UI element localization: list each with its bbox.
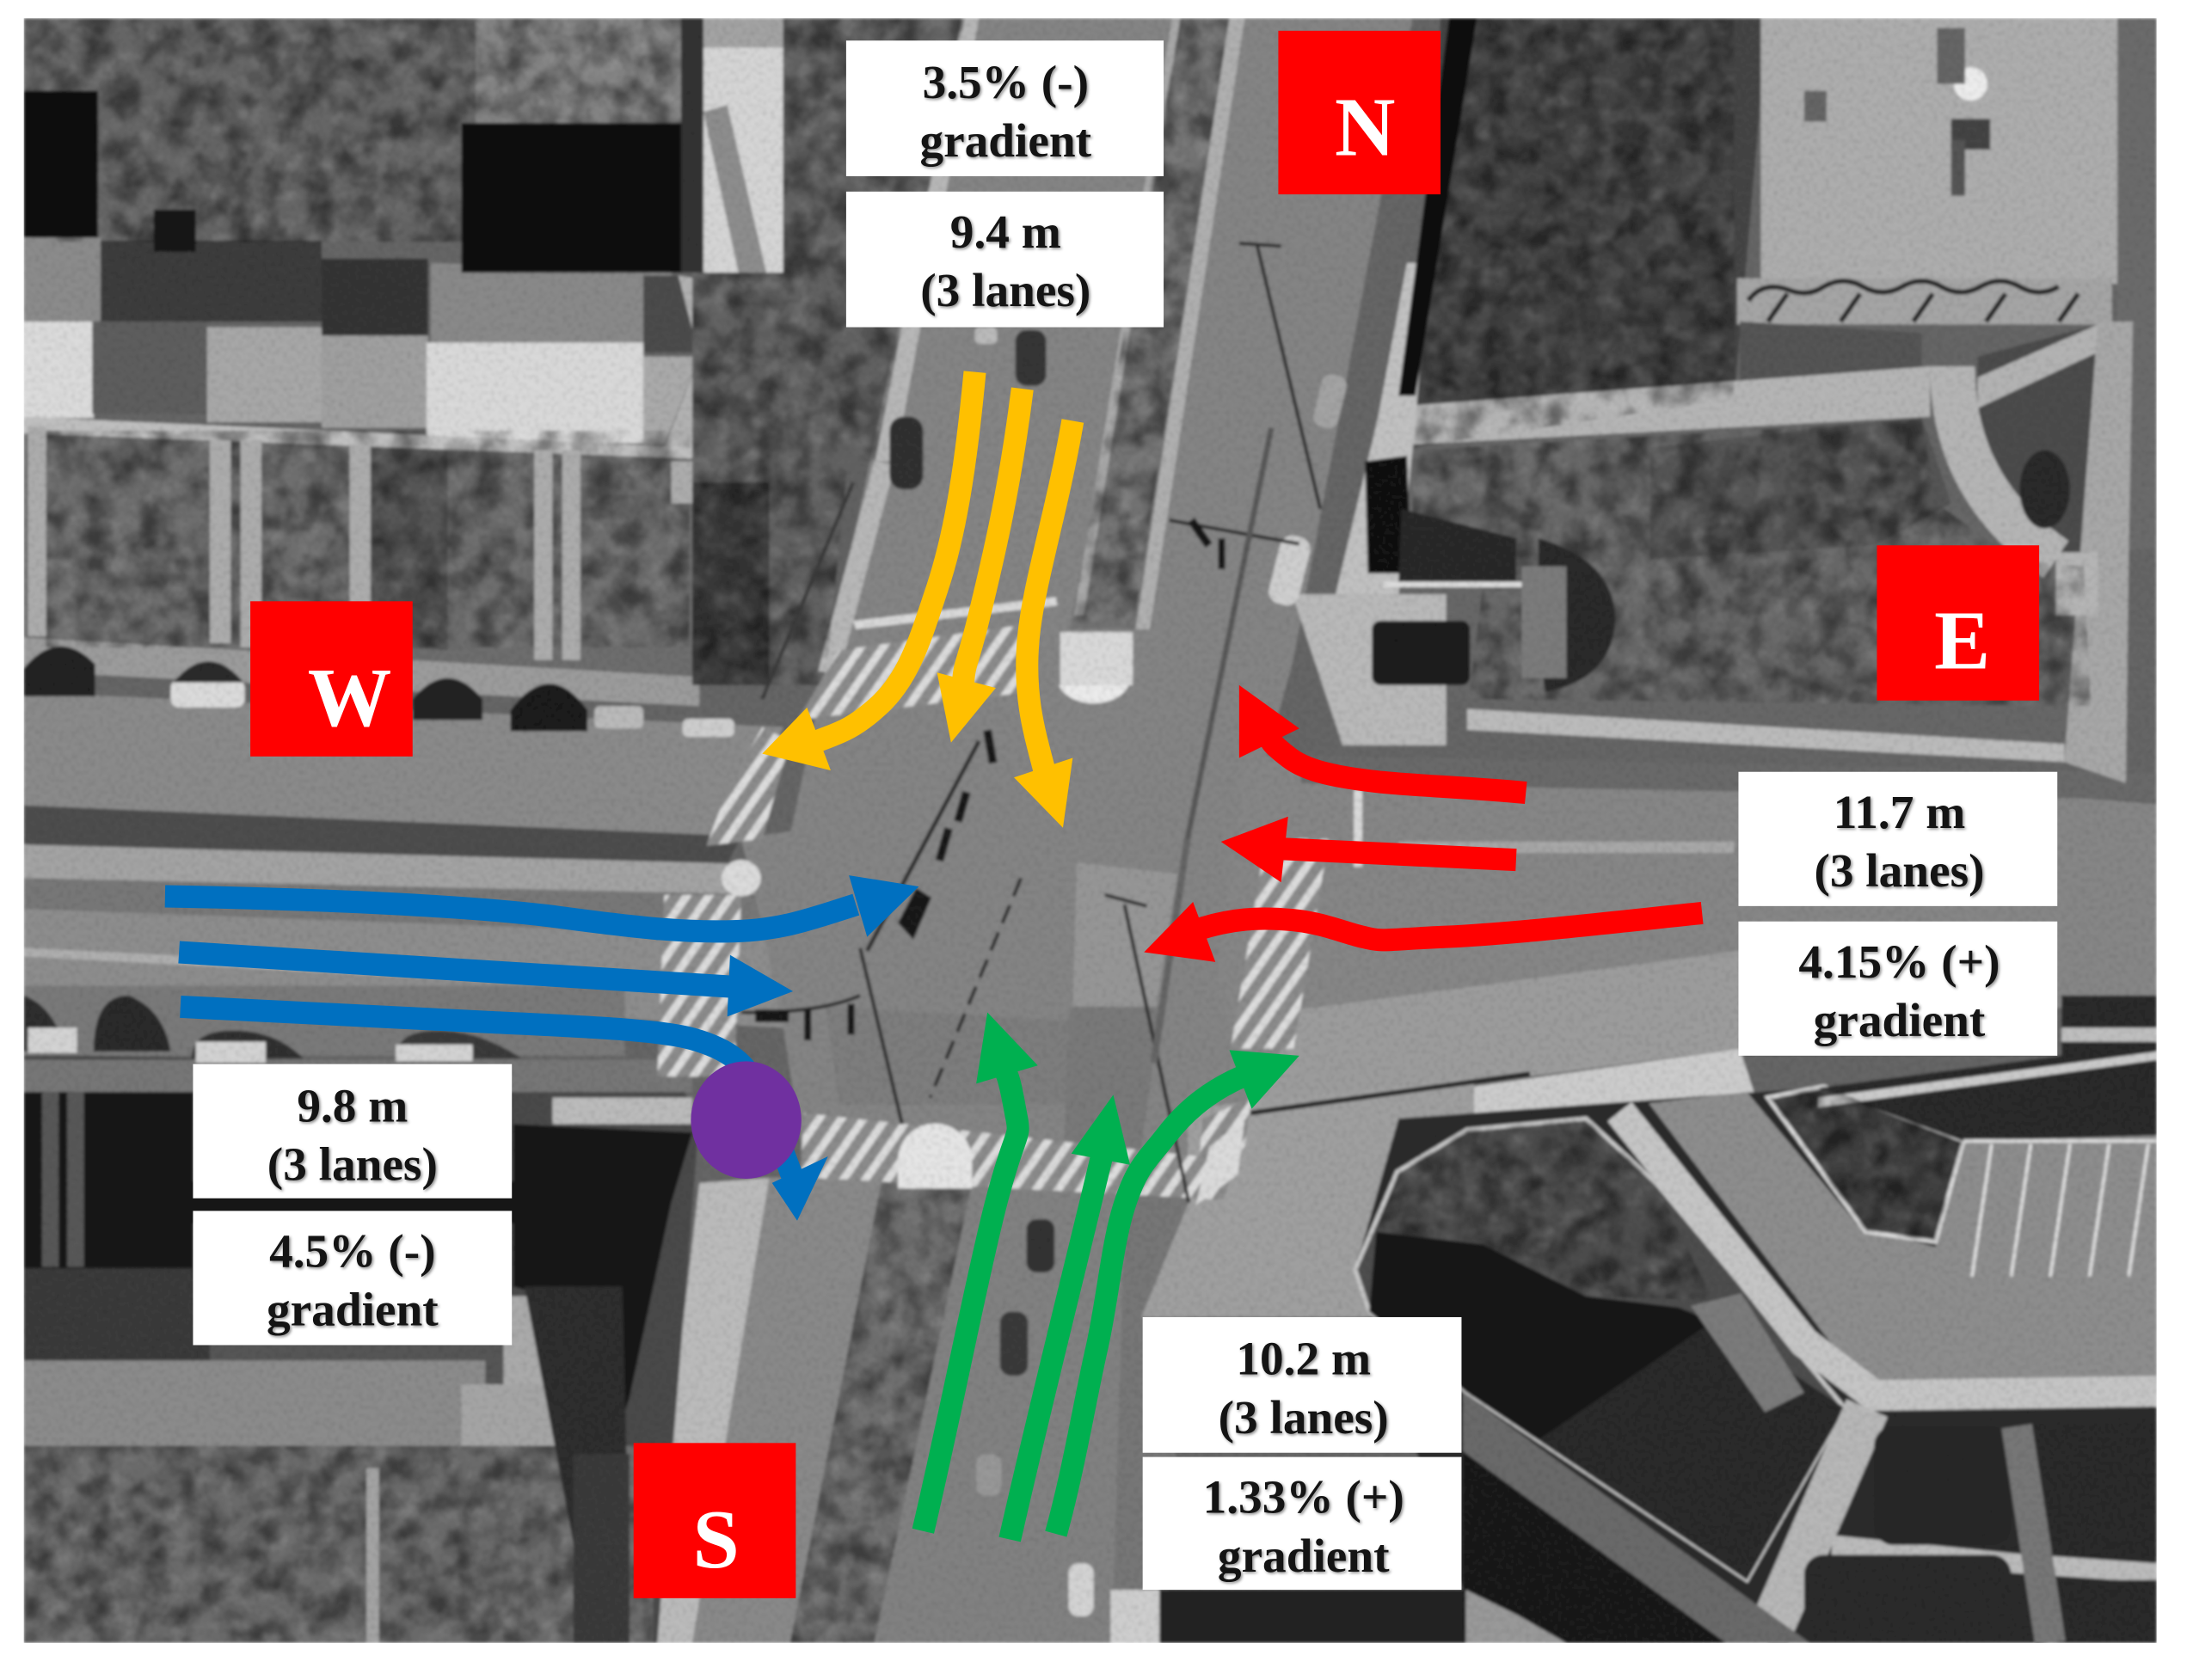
road cars, poles and signal heads [741, 243, 1530, 1616]
direction badge W: W [308, 652, 391, 745]
blue arrow: right turn lane [181, 1007, 828, 1221]
green south approach arrows [923, 1012, 1299, 1540]
red east approach arrows [1144, 685, 1702, 962]
direction badge N: N [1335, 82, 1395, 175]
east label: width [1738, 772, 2057, 906]
south label: gradient: gradient [1218, 1530, 1390, 1582]
direction badge E [1877, 545, 2039, 701]
west label: width [193, 1064, 512, 1199]
east label: width: 11.7 m [1834, 786, 1965, 838]
west label: gradient: 4.5% (-) [269, 1224, 436, 1277]
red arrow: left turn lane [1144, 902, 1702, 962]
green arrow: right turn lane [1056, 1050, 1299, 1534]
north label: width: (3 lanes) [920, 264, 1090, 316]
yellow arrow: left turn lane [1014, 421, 1072, 828]
north label: gradient: 3.5% (-) [923, 56, 1089, 108]
direction badge S [634, 1443, 796, 1598]
north road and verge [692, 18, 1413, 867]
south label: gradient [1143, 1457, 1461, 1590]
west label: width: 9.8 m [297, 1079, 408, 1131]
yellow north approach arrows [762, 372, 1072, 828]
south label: width: 10.2 m [1236, 1333, 1371, 1385]
direction badge S: S [693, 1493, 740, 1586]
yellow arrow: right turn lane [762, 372, 975, 770]
south label: width: (3 lanes) [1219, 1391, 1389, 1444]
south road and verge [646, 1174, 1195, 1643]
direction badge W [250, 601, 413, 757]
green arrow: through lane [1010, 1094, 1130, 1540]
north label: width: 9.4 m [950, 205, 1061, 258]
north label: gradient [846, 40, 1164, 176]
north label: gradient: gradient [919, 114, 1092, 167]
direction badge E: E [1934, 594, 1990, 687]
south label: width [1143, 1317, 1461, 1453]
south label: gradient: 1.33% (+) [1203, 1471, 1404, 1524]
yellow arrow: through lane [937, 389, 1023, 743]
west label: gradient: gradient [267, 1284, 439, 1336]
intersection surface [741, 786, 1247, 1156]
west label: width: (3 lanes) [267, 1138, 438, 1191]
NW trees and rooftops [24, 18, 783, 706]
east label: width: (3 lanes) [1814, 844, 1985, 897]
north label: width [846, 192, 1164, 328]
east label: gradient: 4.15% (+) [1798, 935, 2000, 988]
west road surfaces [24, 692, 783, 1027]
east label: gradient [1738, 922, 2057, 1056]
SW buildings [24, 986, 699, 1643]
green arrow: left turn lane [923, 1012, 1038, 1531]
red arrow: through lane [1221, 817, 1516, 882]
direction badge N [1278, 31, 1440, 194]
NE park, building and lawn [1293, 18, 2157, 783]
parked cars along west road [24, 647, 734, 1063]
west label: gradient [193, 1211, 512, 1345]
east label: gradient: gradient [1814, 994, 1986, 1046]
blue arrow: through lane [179, 953, 793, 1016]
SE paving, lawns, paths and parking [1110, 996, 2157, 1643]
blue arrow: left turn lane [165, 875, 918, 937]
crosswalks and corner islands [657, 597, 1329, 1205]
blue west approach arrows [165, 875, 918, 1221]
east road [1217, 755, 2157, 1113]
red arrow: right turn lane [1239, 685, 1526, 793]
purple circle marker [691, 1061, 802, 1179]
